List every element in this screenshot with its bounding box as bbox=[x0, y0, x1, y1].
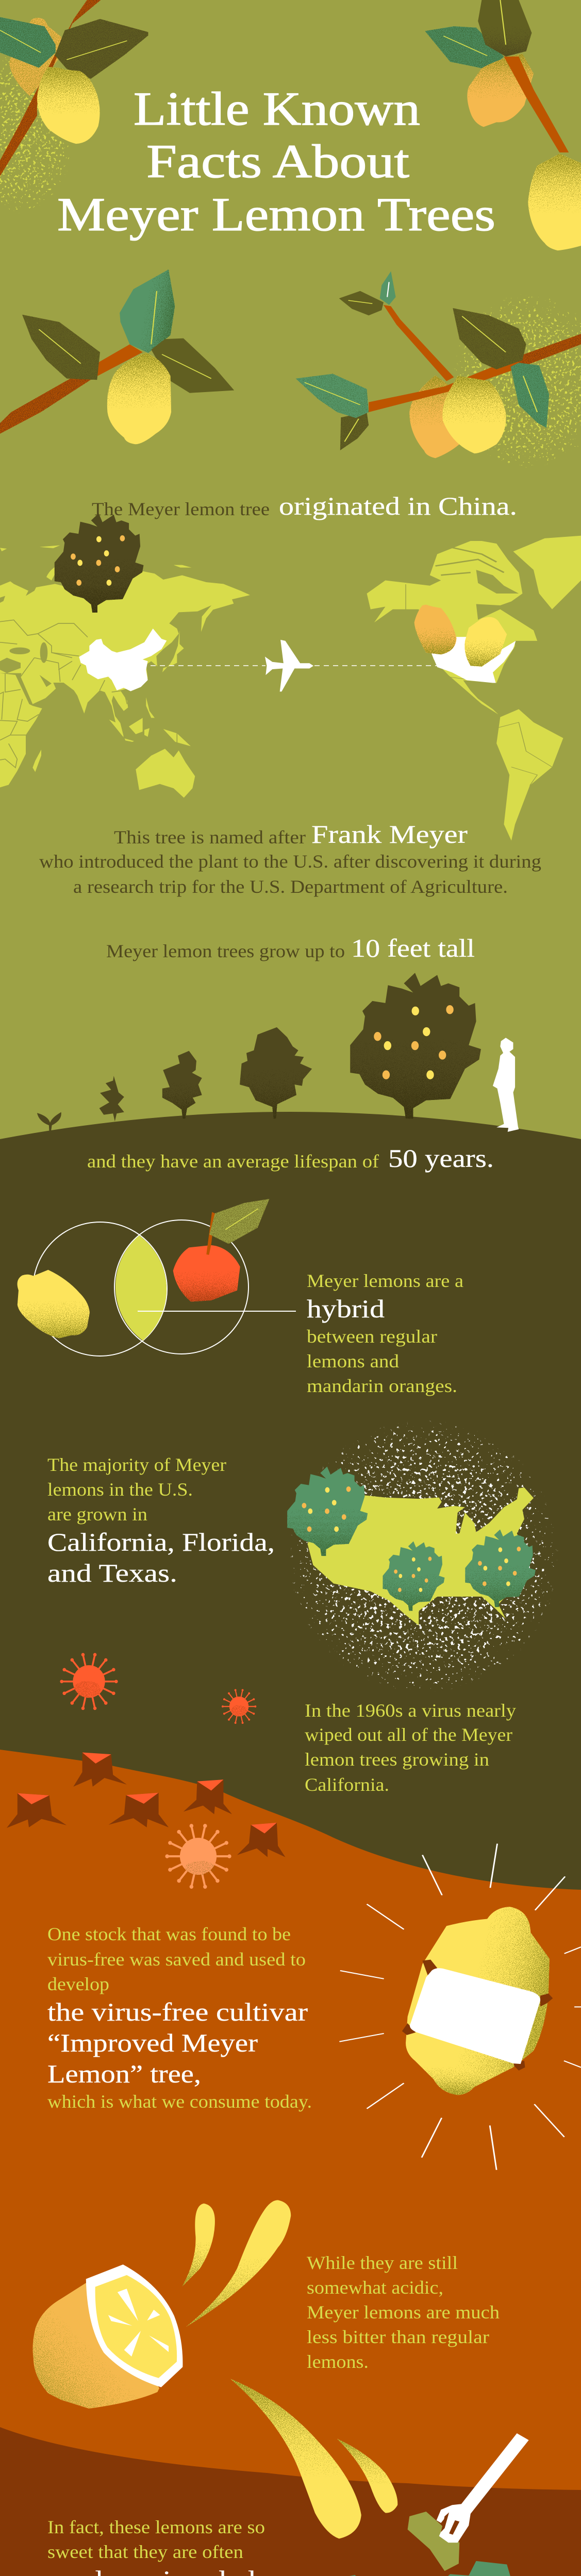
diagram: hybrid venn bbox=[18, 1199, 296, 1356]
text: originated in China bbox=[92, 492, 517, 520]
text: used raw bbox=[47, 2517, 267, 2576]
person silhouette bbox=[493, 1038, 519, 1132]
text: grow up to 10 feet tall bbox=[106, 934, 475, 962]
sprout bbox=[37, 1112, 61, 1133]
virus peach bbox=[167, 1826, 229, 1887]
text: grow up to 10 feet tall: 10 feet tall bbox=[351, 934, 475, 962]
lemon peel side bbox=[32, 2283, 159, 2409]
lemon rind bbox=[86, 2264, 182, 2387]
fork bbox=[437, 2433, 529, 2543]
venn circles bbox=[33, 1220, 248, 1356]
text: California, Florida, Texas: are grown in bbox=[47, 1504, 147, 1524]
text: grow up to 10 feet tall: Meyer lemon trees grow up to bbox=[106, 941, 345, 961]
background: brown section bbox=[0, 2427, 581, 2576]
text: virus-free cultivar: develop bbox=[47, 1974, 109, 1994]
illustration: salad plate and fork bbox=[230, 2379, 549, 2576]
icon: plane bbox=[265, 640, 313, 691]
title: Meyer Lemon Trees bbox=[57, 188, 495, 241]
text: 50 years lifespan bbox=[87, 1144, 494, 1173]
Texas tree bbox=[383, 1541, 444, 1611]
text: hybrid bbox=[307, 1270, 463, 1396]
text: 1960s virus: California. bbox=[305, 1774, 389, 1795]
US map bbox=[308, 1487, 534, 1625]
sapling bbox=[99, 1076, 124, 1122]
text: used raw: In fact, these lemons are so bbox=[47, 2517, 265, 2537]
lemons on USA bbox=[414, 604, 507, 667]
illustration: lemon wearing mask with rays bbox=[339, 1844, 581, 2170]
illustration: tree growth stages bbox=[37, 973, 519, 1133]
text: less bitter: less bitter than regular bbox=[307, 2327, 489, 2347]
lemon flesh bbox=[95, 2275, 177, 2378]
text: virus-free cultivar bbox=[47, 1924, 312, 2112]
text: originated in China: The Meyer lemon tree bbox=[92, 499, 270, 519]
falling leaf bbox=[408, 2512, 459, 2571]
text: California, Florida, Texas: and Texas. bbox=[47, 1558, 177, 1587]
lemon bbox=[406, 1907, 550, 2095]
text: named after Frank Meyer: This tree is named after bbox=[114, 827, 306, 848]
text: named after Frank Meyer: who introduced the plant to the U.S. after discovering it during bbox=[39, 851, 541, 872]
stumps bbox=[7, 1753, 285, 1857]
text: less bitter: Meyer lemons are much bbox=[307, 2302, 500, 2323]
lower right lemon branch bbox=[296, 272, 581, 458]
virus large bbox=[62, 1655, 116, 1708]
top right lemon branch bbox=[425, 0, 581, 250]
California tree bbox=[287, 1467, 368, 1556]
text: virus-free cultivar: virus-free was saved and used to bbox=[47, 1949, 306, 1970]
young tree bbox=[162, 1051, 202, 1118]
text: named after Frank Meyer: a research trip for the U.S. Department of Agriculture. bbox=[73, 876, 508, 897]
background: orange section bbox=[0, 1750, 581, 2576]
mandarin orange bbox=[173, 1199, 270, 1302]
venn overlap bbox=[115, 1235, 167, 1341]
face mask straps bbox=[402, 1960, 553, 2071]
background: dark hill section bbox=[0, 1112, 581, 2576]
top left lemon branch bbox=[0, 0, 148, 176]
text: less bitter: somewhat acidic, bbox=[307, 2277, 443, 2298]
text: hybrid: Meyer lemons are a bbox=[307, 1270, 463, 1291]
text: 1960s virus: wiped out all of the Meyer bbox=[305, 1724, 512, 1745]
map: the Americas bbox=[367, 536, 581, 841]
text: California, Florida, Texas bbox=[47, 1454, 275, 1587]
map: USA highlighted bbox=[431, 637, 516, 683]
lemon bbox=[18, 1270, 90, 1338]
lower left lemon branch bbox=[0, 269, 234, 444]
text: hybrid: mandarin oranges. bbox=[307, 1376, 457, 1396]
text: 1960s virus: lemon trees growing in bbox=[305, 1749, 489, 1770]
title: Little Known bbox=[134, 82, 420, 135]
face mask bbox=[410, 1968, 540, 2064]
text: less bitter: lemons. bbox=[307, 2351, 369, 2372]
splatter: lime top left bbox=[0, 49, 75, 214]
text: California, Florida, Texas: The majority of Meyer bbox=[47, 1454, 226, 1475]
text: virus-free cultivar: Lemon” tree, bbox=[47, 2059, 201, 2088]
text: virus-free cultivar: the virus-free cultivar bbox=[47, 1997, 308, 2026]
text: virus-free cultivar: “Improved Meyer bbox=[47, 2028, 258, 2057]
text: 50 years lifespan: and they have an average lifespan of bbox=[87, 1151, 379, 1172]
juice drop small bbox=[182, 2204, 215, 2286]
text: California, Florida, Texas: lemons in the U.S. bbox=[47, 1479, 193, 1500]
full grown tree with fruit bbox=[350, 973, 481, 1118]
text: less bitter bbox=[307, 2252, 500, 2372]
juice drop large bbox=[186, 2200, 291, 2327]
connector line bbox=[138, 1311, 296, 1312]
salad leaves bbox=[306, 2561, 512, 2576]
text: 1960s virus bbox=[305, 1700, 516, 1795]
text: used raw: sweet that they are often bbox=[47, 2541, 243, 2562]
dashed flight path bbox=[151, 665, 438, 666]
illustration: US map with three trees bbox=[287, 1467, 536, 1625]
text: hybrid: hybrid bbox=[307, 1294, 385, 1323]
illustration: viruses and stumps bbox=[7, 1655, 285, 1887]
world map bbox=[0, 513, 581, 841]
illustration: header branches, leaves and lemons bbox=[0, 0, 581, 458]
text: hybrid: lemons and bbox=[307, 1351, 399, 1371]
Florida tree bbox=[465, 1530, 536, 1607]
rays bbox=[339, 1844, 581, 2170]
text: virus-free cultivar: One stock that was found to be bbox=[47, 1924, 291, 1944]
text: 50 years lifespan: 50 years. bbox=[388, 1144, 494, 1173]
text: hybrid: between regular bbox=[307, 1326, 437, 1347]
text: originated in China: originated in China. bbox=[279, 492, 517, 520]
medium tree bbox=[240, 1027, 312, 1118]
title bbox=[57, 82, 495, 241]
dripping juice large bbox=[230, 2379, 361, 2539]
dripping juice small bbox=[337, 2439, 397, 2513]
text: 1960s virus: In the 1960s a virus nearly bbox=[305, 1700, 516, 1721]
map: China highlighted bbox=[79, 629, 167, 691]
text: virus-free cultivar: which is what we consume today. bbox=[47, 2091, 312, 2112]
text: named after Frank Meyer bbox=[39, 820, 541, 897]
tree on China bbox=[55, 513, 143, 613]
map: Eurasia, Africa and Oceania bbox=[0, 545, 250, 798]
text: less bitter: While they are still bbox=[307, 2252, 458, 2273]
text: named after Frank Meyer: Frank Meyer bbox=[311, 820, 468, 849]
virus small bbox=[223, 1690, 255, 1723]
lemon segments bbox=[108, 2289, 169, 2357]
text: California, Florida, Texas: California, Florida, bbox=[47, 1528, 275, 1556]
splatter: white behind US map bbox=[289, 1419, 559, 1692]
splatter: lime right of header bbox=[451, 294, 581, 469]
illustration: cut lemon and drops bbox=[32, 2200, 291, 2409]
title: Facts About bbox=[146, 135, 410, 188]
